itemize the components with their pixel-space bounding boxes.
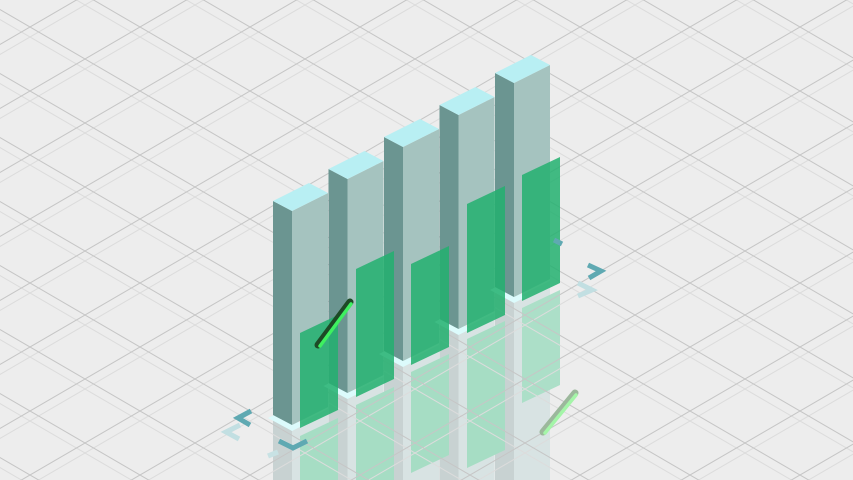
icon: reflected stick — [543, 393, 576, 433]
bar 3 — [379, 119, 439, 367]
reflections — [273, 281, 560, 480]
bar 5 — [490, 55, 550, 303]
green value panels — [300, 157, 560, 428]
bar 2 — [324, 151, 384, 399]
bar 1 — [268, 183, 328, 431]
bar 4 — [434, 87, 494, 335]
icon: green stick — [318, 302, 351, 346]
markers: chevrons — [226, 240, 601, 456]
